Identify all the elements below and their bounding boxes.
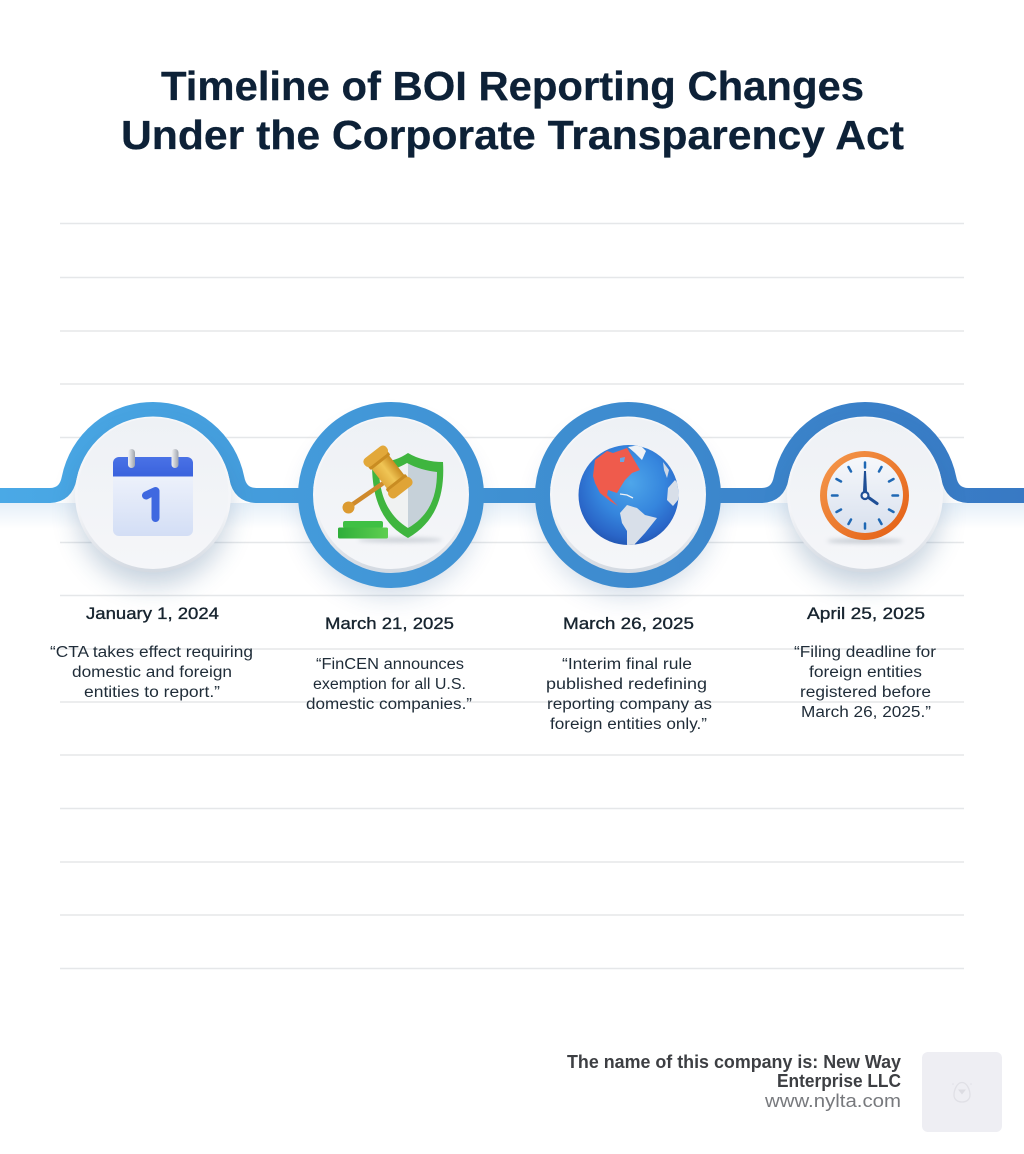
description: FinCEN announces: domestic companies.” [306, 696, 472, 713]
milestone 2: March 21, 2025 [306, 416, 472, 713]
date: March 26, 2025: March 26, 2025 [563, 614, 694, 633]
icon: clock [820, 451, 909, 544]
icon: calendar [113, 449, 193, 536]
description: FinCEN announces: exemption for all U.S. [313, 676, 466, 693]
description: FinCEN announces [306, 656, 472, 713]
description: Filing deadline: registered before [800, 684, 931, 701]
description: Interim final rule: published redefining [546, 676, 707, 693]
description: Interim final rule: reporting company as [547, 696, 712, 713]
description: Filing deadline [794, 644, 936, 721]
date: April 25, 2025: April 25, 2025 [807, 604, 925, 623]
date: January 1, 2024: January 1, 2024 [86, 604, 219, 623]
timeline ribbon [0, 409, 1024, 596]
description: Filing deadline: foreign entities [809, 664, 922, 681]
description: CTA takes effect [50, 644, 253, 701]
date: March 21, 2025: March 21, 2025 [325, 614, 454, 633]
milestone 3: March 26, 2025 [546, 416, 712, 733]
footer: company text: The name of this company is: New Way [567, 1052, 901, 1072]
footer: logo placeholder [922, 1052, 1002, 1132]
description: CTA takes effect: “CTA takes effect requiring [50, 644, 253, 661]
description: FinCEN announces: “FinCEN announces [316, 656, 464, 673]
title [121, 63, 904, 158]
title: Under the Corporate Transparency Act [121, 112, 904, 158]
footer: company text [567, 1052, 901, 1111]
background ruled lines [60, 224, 964, 968]
description: Interim final rule [546, 656, 712, 733]
footer: company text: Enterprise LLC [777, 1071, 901, 1091]
description: Filing deadline: “Filing deadline for [794, 644, 936, 661]
description: CTA takes effect: entities to report.” [84, 684, 220, 701]
description: Filing deadline: March 26, 2025.” [801, 704, 931, 721]
description: Interim final rule: foreign entities only.” [550, 716, 707, 733]
description: CTA takes effect: domestic and foreign [72, 664, 232, 681]
milestone 1: January 1, 2024 [50, 416, 253, 701]
icon: globe [578, 445, 680, 546]
footer: company text: www.nylta.com [764, 1090, 901, 1111]
description: Interim final rule: “Interim final rule [562, 656, 692, 673]
milestone 4: April 25, 2025 [787, 416, 943, 721]
icon: gavel and shield [338, 444, 443, 542]
title: Timeline of BOI Reporting Changes [161, 63, 864, 109]
